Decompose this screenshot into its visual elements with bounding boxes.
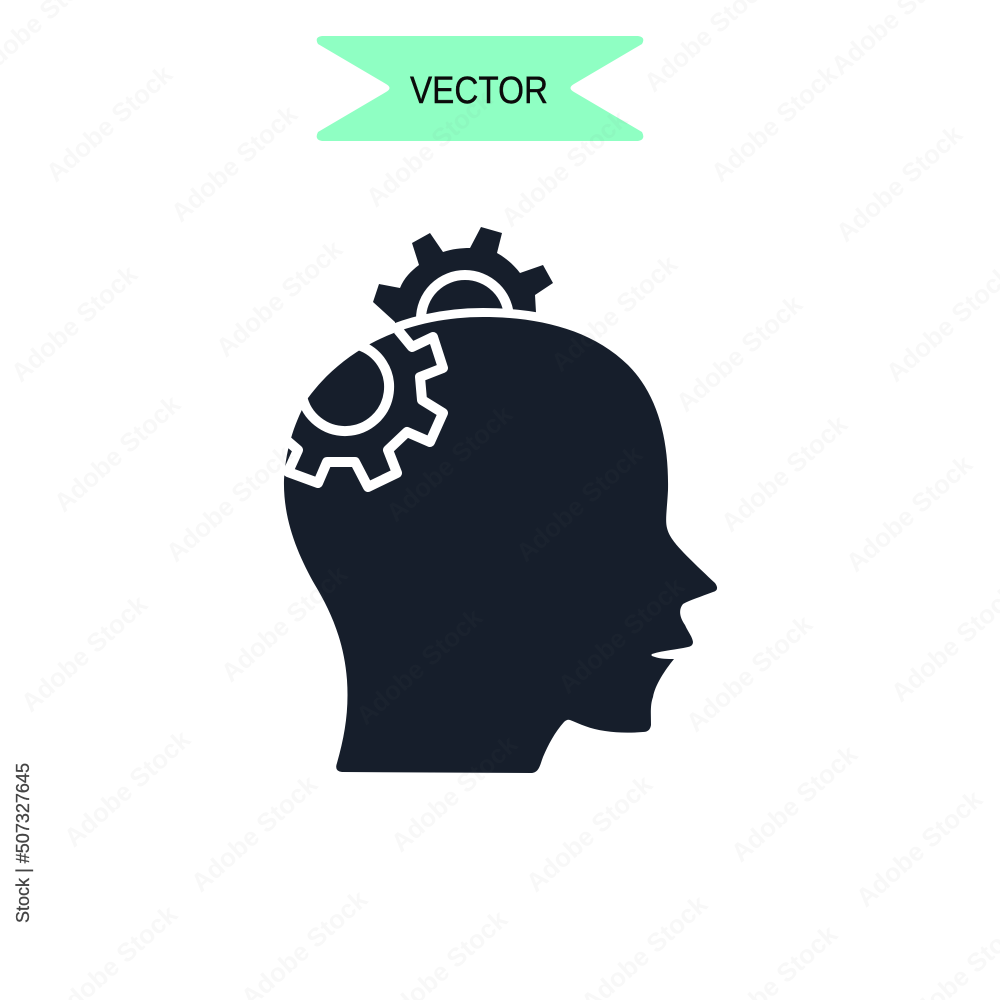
watermark: repeated stock text: Adobe Stock <box>545 249 683 378</box>
watermark: repeated stock text: Adobe Stock <box>840 449 978 578</box>
watermark: repeated stock text: Adobe Stock <box>705 59 843 188</box>
icon: left gear outline <box>284 330 443 487</box>
watermark: repeated stock text: Adobe Stock <box>215 559 353 688</box>
watermark: repeated stock text: Adobe Stock <box>165 99 303 228</box>
watermark: repeated stock text: Adobe Stock <box>185 769 323 898</box>
watermark: repeated stock text: Adobe Stock <box>552 571 690 700</box>
stock id label: Stock | #507327645 <box>13 763 33 923</box>
watermark: repeated stock text: Adobe Stock <box>58 724 196 853</box>
watermark: repeated stock text: Adobe Stock <box>510 439 648 568</box>
watermark: repeated stock text: Adobe Stock <box>830 119 968 248</box>
watermark: repeated stock text: Adobe Stock <box>715 409 853 538</box>
watermark: repeated stock text: Adobe Stock <box>495 104 633 233</box>
icon: top gear <box>373 227 553 363</box>
icon: head silhouette <box>284 317 717 773</box>
watermark: repeated stock text: Adobe Stock <box>210 234 348 363</box>
watermark: repeated stock text: Adobe Stock <box>520 769 658 898</box>
watermark: repeated stock text: Adobe Stock <box>48 389 186 518</box>
watermark: repeated stock text: Adobe Stock <box>670 289 808 418</box>
watermark: repeated stock text: Adobe Stock <box>5 259 143 388</box>
watermark: repeated stock text: Adobe Stock <box>360 84 498 213</box>
watermark: repeated stock text: Adobe Stock <box>385 729 523 858</box>
watermark: repeated stock text: Adobe Stock <box>850 784 988 913</box>
watermark: repeated stock text: Adobe Stock <box>725 739 863 868</box>
icon: head with gears <box>284 227 717 773</box>
watermark: repeated stock text: Adobe Stock <box>350 602 488 731</box>
watermark: repeated stock text: Adobe Stock <box>380 399 518 528</box>
watermark: repeated stock text: Adobe Stock <box>15 589 153 718</box>
watermark: repeated stock text: Adobe Stock <box>680 609 818 738</box>
banner: vector ribbon <box>317 36 643 141</box>
watermark: repeated stock text: Adobe Stock <box>160 439 298 568</box>
watermark: repeated stock text: Adobe Stock <box>40 59 178 188</box>
banner label: VECTOR <box>410 70 548 112</box>
